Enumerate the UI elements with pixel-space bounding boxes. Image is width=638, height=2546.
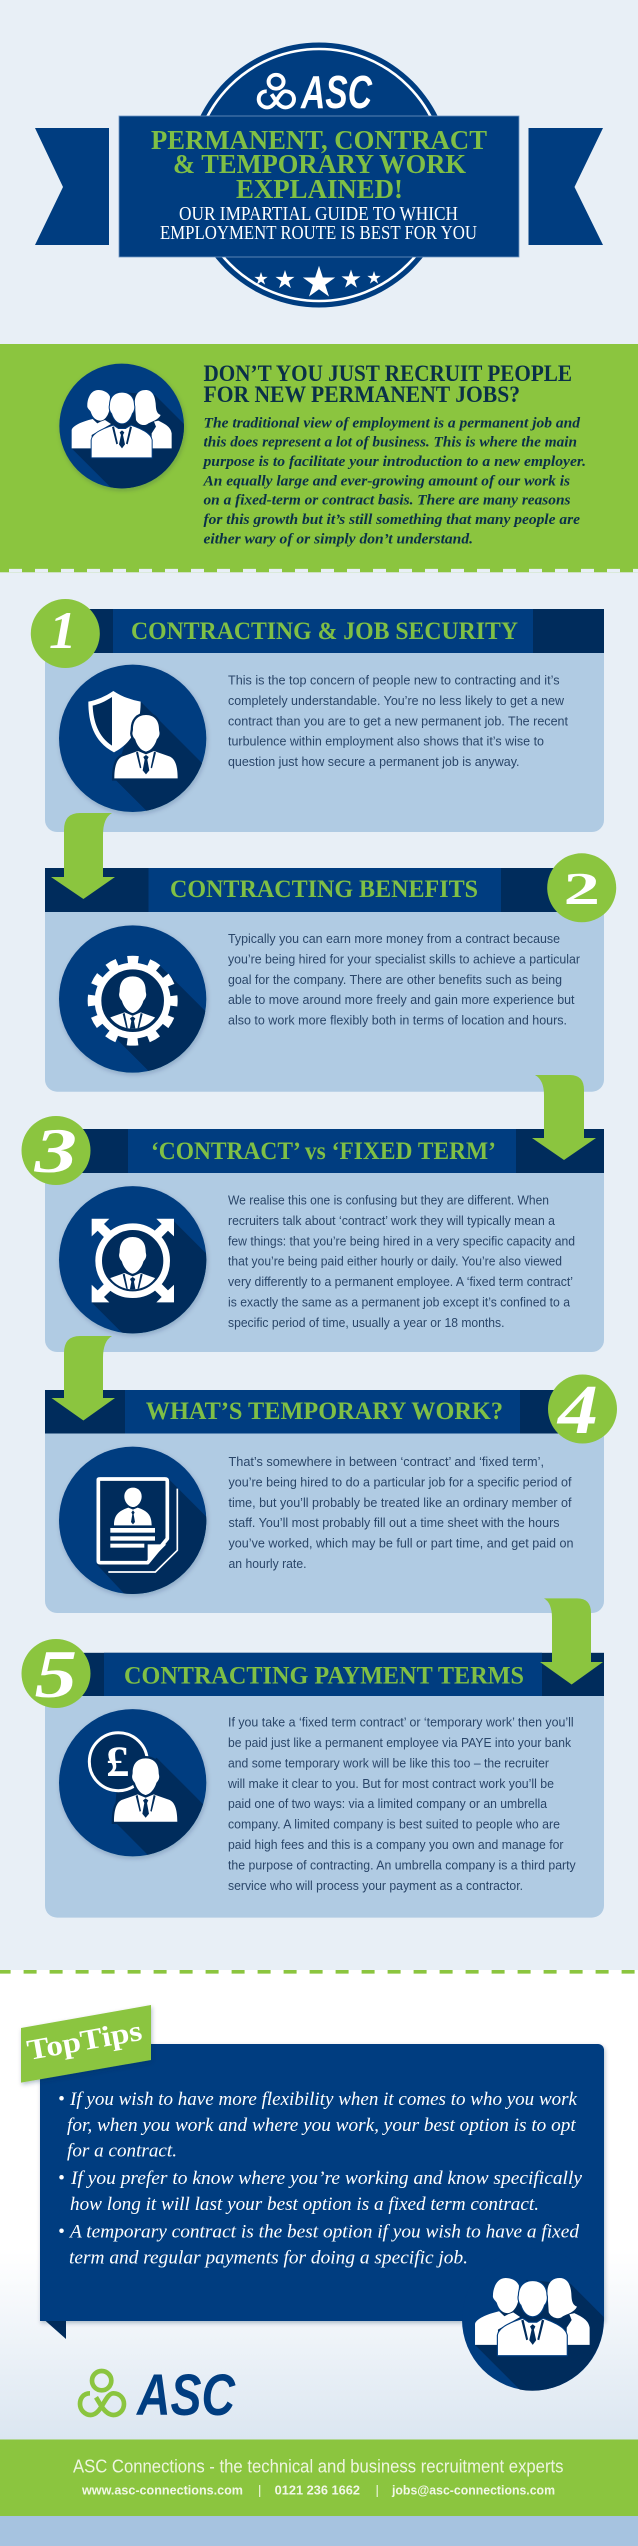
body text: is exactly the same as a permanent job except it’s confined to a xyxy=(228,1294,571,1310)
number badge: 2 xyxy=(564,863,600,914)
section body background xyxy=(45,912,604,1092)
panel: intro xyxy=(0,344,638,572)
logo: ASC xyxy=(80,2363,236,2428)
logo: ASC: ASC xyxy=(135,2363,236,2428)
logo: ASC white xyxy=(259,66,373,118)
body text xyxy=(228,931,581,1028)
lower white gradient background xyxy=(0,1970,638,2440)
intro text: on a fixed-term or contract basis. There are many reasons xyxy=(204,493,571,509)
title banner xyxy=(119,116,519,257)
tips text: If you wish to have more flexibility when it comes to who you work xyxy=(69,2089,578,2110)
body text: contract than you are to get a new permanent job. The recent xyxy=(228,713,568,728)
body text: specific period of time, usually a year or 18 months. xyxy=(228,1315,504,1330)
tips text: If you prefer to know where you’re working and know specifically xyxy=(70,2168,583,2189)
tips text: • xyxy=(58,2089,65,2110)
heading: CONTRACTING BENEFITS xyxy=(170,874,478,903)
arrow: section 3 to 4 xyxy=(52,1336,115,1420)
body text: paid high fees and this is a company you own and manage for xyxy=(228,1837,564,1852)
subtitle: OUR IMPARTIAL GUIDE TO WHICH xyxy=(179,204,458,225)
number badge xyxy=(547,853,616,922)
tips text: for, when you work and where you work, your best option is to opt xyxy=(67,2115,576,2136)
top tips ribbon xyxy=(21,2005,151,2083)
right ribbon tail xyxy=(528,128,603,245)
tips text: for a contract. xyxy=(67,2141,177,2162)
footer contact details: jobs@asc-connections.com xyxy=(391,2482,555,2497)
heading: CONTRACTING PAYMENT TERMS xyxy=(124,1660,524,1689)
number badge xyxy=(22,1115,90,1186)
body text: an hourly rate. xyxy=(228,1556,306,1571)
icon: pound and person xyxy=(58,1709,210,1860)
intro heading xyxy=(204,361,572,408)
section body background xyxy=(45,1696,604,1918)
body text: you’ve worked, which may be full or part time, and get paid on xyxy=(228,1536,574,1551)
body text: completely understandable. You’re no less likely to get a new xyxy=(228,693,565,708)
panel: section 1 xyxy=(31,599,604,832)
footer contact details: 0121 236 1662 xyxy=(275,2482,360,2497)
tips text: • xyxy=(58,2168,65,2189)
tips text xyxy=(58,2089,583,2268)
body text xyxy=(228,1192,575,1330)
title: & TEMPORARY WORK xyxy=(173,148,467,179)
footer contact details xyxy=(81,2482,555,2497)
top tips ribbon: TopTips xyxy=(25,2015,144,2067)
icon: arrows and person xyxy=(58,1186,210,1338)
icon: team xyxy=(59,364,190,493)
stars xyxy=(254,266,381,296)
body text: goal for the company. There are other benefits such as being xyxy=(228,972,562,987)
logo: ASC white: ASC xyxy=(300,66,373,118)
footer contact details: | xyxy=(258,2482,261,2497)
header bar xyxy=(45,1129,604,1173)
number badge xyxy=(31,599,100,668)
heading: CONTRACTING & JOB SECURITY xyxy=(131,616,518,645)
intro heading: DON’T YOU JUST RECRUIT PEOPLE xyxy=(204,361,572,387)
title: PERMANENT, CONTRACT xyxy=(151,124,487,155)
number badge: 4 xyxy=(556,1372,598,1449)
intro text: for this growth but it’s still something that many people are xyxy=(204,512,581,528)
tips text: • xyxy=(58,2222,65,2243)
body text: We realise this one is confusing but they are different. When xyxy=(228,1192,549,1208)
body text: that you’re being paid either hourly or daily. You’re also viewed xyxy=(228,1254,562,1269)
body text: time, but you’ll probably be treated like an ordinary member of xyxy=(228,1495,572,1510)
section body background xyxy=(45,653,604,832)
icon: gear and person xyxy=(58,925,210,1076)
body text: very differently to a permanent employee. A ‘fixed term contract’ xyxy=(228,1274,573,1289)
body text: will make it clear to you. But for most contract work you’ll be xyxy=(227,1776,554,1791)
body text: be paid just like a permanent employee via PAYE into your bank xyxy=(228,1735,571,1750)
body text: able to move around more freely and gain more experience but xyxy=(228,992,575,1007)
number badge: 1 xyxy=(49,602,76,660)
body text: turbulence within employment also shows that it’s wise to xyxy=(228,734,544,749)
header bar xyxy=(45,1390,604,1434)
number badge: 3 xyxy=(33,1115,77,1186)
body text: Typically you can earn more money from a contract because xyxy=(228,931,560,946)
medallion xyxy=(186,42,452,308)
header bar xyxy=(45,609,604,653)
panel: section 3 xyxy=(22,1115,604,1352)
subtitle xyxy=(160,204,477,244)
body text: If you take a ‘fixed term contract’ or ‘temporary work’ then you’ll xyxy=(228,1715,574,1730)
heading: WHAT’S TEMPORARY WORK? xyxy=(146,1396,503,1425)
number badge xyxy=(22,1636,90,1712)
subtitle: EMPLOYMENT ROUTE IS BEST FOR YOU xyxy=(160,223,477,244)
tips text: term and regular payments for doing a specific job. xyxy=(69,2247,468,2268)
icon: pound and person: £ xyxy=(106,1738,129,1786)
left ribbon tail xyxy=(35,128,109,245)
body text: That’s somewhere in between ‘contract’ and ‘fixed term’, xyxy=(228,1454,544,1469)
body text: you’re being hired to do a particular job for a specific period of xyxy=(228,1474,572,1489)
panel: section 5 xyxy=(22,1636,604,1918)
intro text: An equally large and ever-growing amount of our work is xyxy=(202,473,570,489)
dashed divider xyxy=(0,1970,638,1974)
footer xyxy=(0,2440,638,2546)
body text: also to work more flexibly both in terms of location and hours. xyxy=(228,1013,567,1028)
intro heading: FOR NEW PERMANENT JOBS? xyxy=(204,382,520,408)
intro text: this does represent a lot of business. This is where the main xyxy=(204,435,577,451)
panel: section 4 xyxy=(45,1372,617,1613)
speech bubble xyxy=(40,2044,604,2339)
section body background xyxy=(45,1434,604,1613)
footer contact details: www.asc-connections.com xyxy=(81,2482,243,2497)
body text xyxy=(227,1715,576,1893)
body text: few things: that you’re being hired in a very specific capacity and xyxy=(228,1233,575,1248)
tips text: how long it will last your best option is a fixed term contract. xyxy=(70,2194,539,2215)
body text: recruiters talk about ‘contract’ work they will typically mean a xyxy=(228,1213,556,1228)
intro text: purpose is to facilitate your introduction to a new employer. xyxy=(201,454,586,470)
body text: and some temporary work will be like this too – the recruiter xyxy=(228,1755,550,1770)
body text: question just how secure a permanent job is anyway. xyxy=(228,754,520,769)
tips text: A temporary contract is the best option if you wish to have a fixed xyxy=(68,2222,579,2243)
intro text: The traditional view of employment is a permanent job and xyxy=(204,415,581,431)
header bar xyxy=(45,1653,604,1696)
body text: service who will process your payment as a contractor. xyxy=(228,1878,523,1893)
icon: team xyxy=(462,2248,611,2396)
arrow: section 4 to 5 xyxy=(540,1598,603,1684)
arrow: section 1 to 2 xyxy=(51,813,115,899)
section body background xyxy=(45,1173,604,1352)
header badge xyxy=(35,42,603,308)
body text: you’re being hired for your specialist skills to achieve a particular xyxy=(228,951,581,966)
icon: documents xyxy=(58,1446,210,1598)
body text: paid one of two ways: via a limited company or an umbrella xyxy=(228,1796,548,1811)
header bar xyxy=(45,868,604,912)
intro text xyxy=(201,415,586,547)
title xyxy=(151,124,487,204)
number badge xyxy=(548,1372,617,1449)
number badge: 5 xyxy=(35,1636,77,1712)
body text xyxy=(228,672,568,769)
title: EXPLAINED! xyxy=(236,173,403,204)
body text xyxy=(228,1454,574,1571)
body text: the purpose of contracting. An umbrella company is a third party xyxy=(228,1857,576,1872)
body text: This is the top concern of people new to contracting and it’s xyxy=(228,672,560,688)
icon: shield and person xyxy=(58,664,210,816)
panel: top tips xyxy=(21,2005,611,2396)
footer contact details: | xyxy=(376,2482,379,2497)
intro text: either wary of or simply don’t understand. xyxy=(204,531,473,547)
body text: company. A limited company is best suited to people who are xyxy=(228,1817,560,1832)
body text: staff. You’ll most probably fill out a time sheet with the hours xyxy=(228,1515,560,1530)
panel: section 2 xyxy=(45,853,616,1092)
footer tagline: ASC Connections - the technical and business recruitment experts xyxy=(73,2457,564,2477)
heading: ‘CONTRACT’ vs ‘FIXED TERM’ xyxy=(151,1136,496,1165)
arrow: section 2 to 3 xyxy=(532,1075,596,1160)
